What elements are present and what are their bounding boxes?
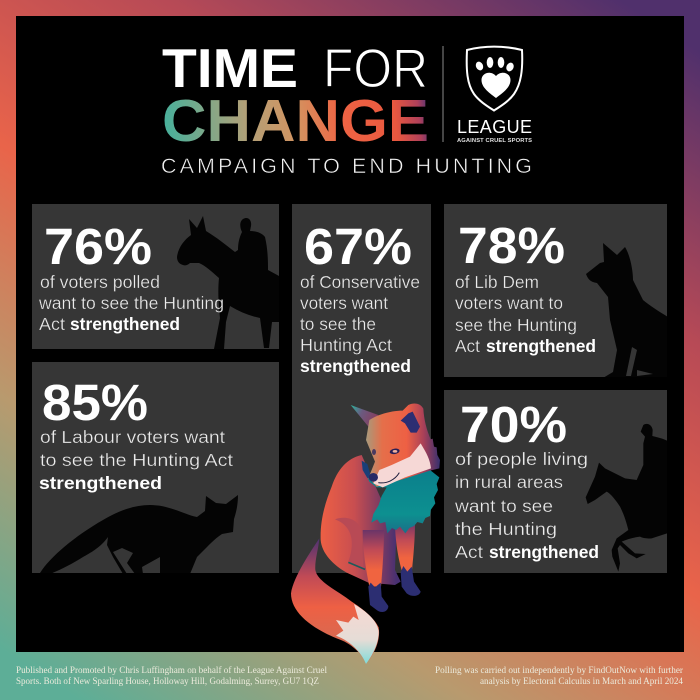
illustration: gradient fox <box>291 404 440 664</box>
description: Act <box>39 314 65 334</box>
description <box>300 272 420 376</box>
panel: 70% of rural people <box>444 390 667 573</box>
description: Act <box>455 542 483 562</box>
description <box>38 272 224 334</box>
description: of Conservative <box>300 272 420 292</box>
silhouette: horse and rider <box>177 216 280 349</box>
footer: polling note: analysis by Electoral Calculus in March and April 2024 <box>480 677 683 687</box>
description: Hunting Act <box>300 335 392 355</box>
description: the Hunting <box>455 519 557 539</box>
fox body <box>321 455 401 585</box>
stat: 70% <box>460 396 567 453</box>
panel: 85% of Labour voters <box>32 362 279 574</box>
description: in rural areas <box>455 472 563 492</box>
subtitle: CAMPAIGN TO END HUNTING <box>161 154 532 178</box>
description: want to see <box>454 496 553 516</box>
description <box>455 272 596 356</box>
description: Act <box>455 336 480 356</box>
icon: shield with paw <box>467 47 522 110</box>
description: strengthened <box>486 336 596 356</box>
footer: publisher imprint <box>16 665 327 687</box>
description <box>39 427 233 493</box>
fox haunch <box>335 518 365 569</box>
description: to see the <box>300 314 376 334</box>
sitting fox leg gaps <box>626 347 653 376</box>
title: Time for Change: TIME <box>162 38 298 99</box>
logo: League Against Cruel Sports: AGAINST CRUEL SPORTS <box>457 138 532 144</box>
title: Time for Change: FOR <box>323 38 428 99</box>
footer: publisher imprint: Sports. Both of New Sparling House, Holloway Hill, Godalming, Surrey, GU7 1QZ <box>16 676 319 687</box>
description: of people living <box>455 449 588 469</box>
description: strengthened <box>39 473 162 493</box>
stat: 67% <box>304 218 412 275</box>
silhouette: galloping horse and rider <box>586 424 667 572</box>
description: see the Hunting <box>455 315 577 335</box>
title: Time for Change <box>162 38 429 154</box>
panel: 76% of voters polled <box>32 204 280 349</box>
footer: polling note: Polling was carried out independently by FindOutNow with further <box>435 665 684 676</box>
footer: polling note <box>435 665 684 687</box>
description: strengthened <box>300 356 411 376</box>
description: of Lib Dem <box>455 272 539 292</box>
stat: 76% <box>44 218 152 275</box>
footer: publisher imprint: Published and Promoted by Chris Luffingham on behalf of the League Against Cruel <box>16 665 327 676</box>
description: of voters polled <box>40 272 160 292</box>
fox tail <box>291 538 379 664</box>
divider <box>442 46 444 142</box>
stat: 78% <box>458 217 565 274</box>
description: strengthened <box>70 314 180 334</box>
silhouette: sitting fox <box>586 243 668 378</box>
stat: 85% <box>42 374 148 431</box>
logo: League Against Cruel Sports: LEAGUE <box>457 117 532 137</box>
panel: 78% of Lib Dem voters <box>444 204 668 378</box>
description <box>454 449 599 562</box>
silhouette: running fox <box>40 495 238 574</box>
description: strengthened <box>489 542 599 562</box>
title: Time for Change: CHANGE <box>162 88 429 154</box>
fox front legs <box>363 522 421 612</box>
panel: 67% of Conservative voters <box>292 204 431 573</box>
description: of Labour voters want <box>40 427 225 447</box>
logo: League Against Cruel Sports <box>457 47 532 144</box>
fox head <box>351 404 440 487</box>
description: voters want to <box>455 293 563 313</box>
fox chest ruff <box>362 461 439 533</box>
description: want to see the Hunting <box>38 293 224 313</box>
description: voters want <box>300 293 388 313</box>
description: to see the Hunting Act <box>40 450 233 470</box>
